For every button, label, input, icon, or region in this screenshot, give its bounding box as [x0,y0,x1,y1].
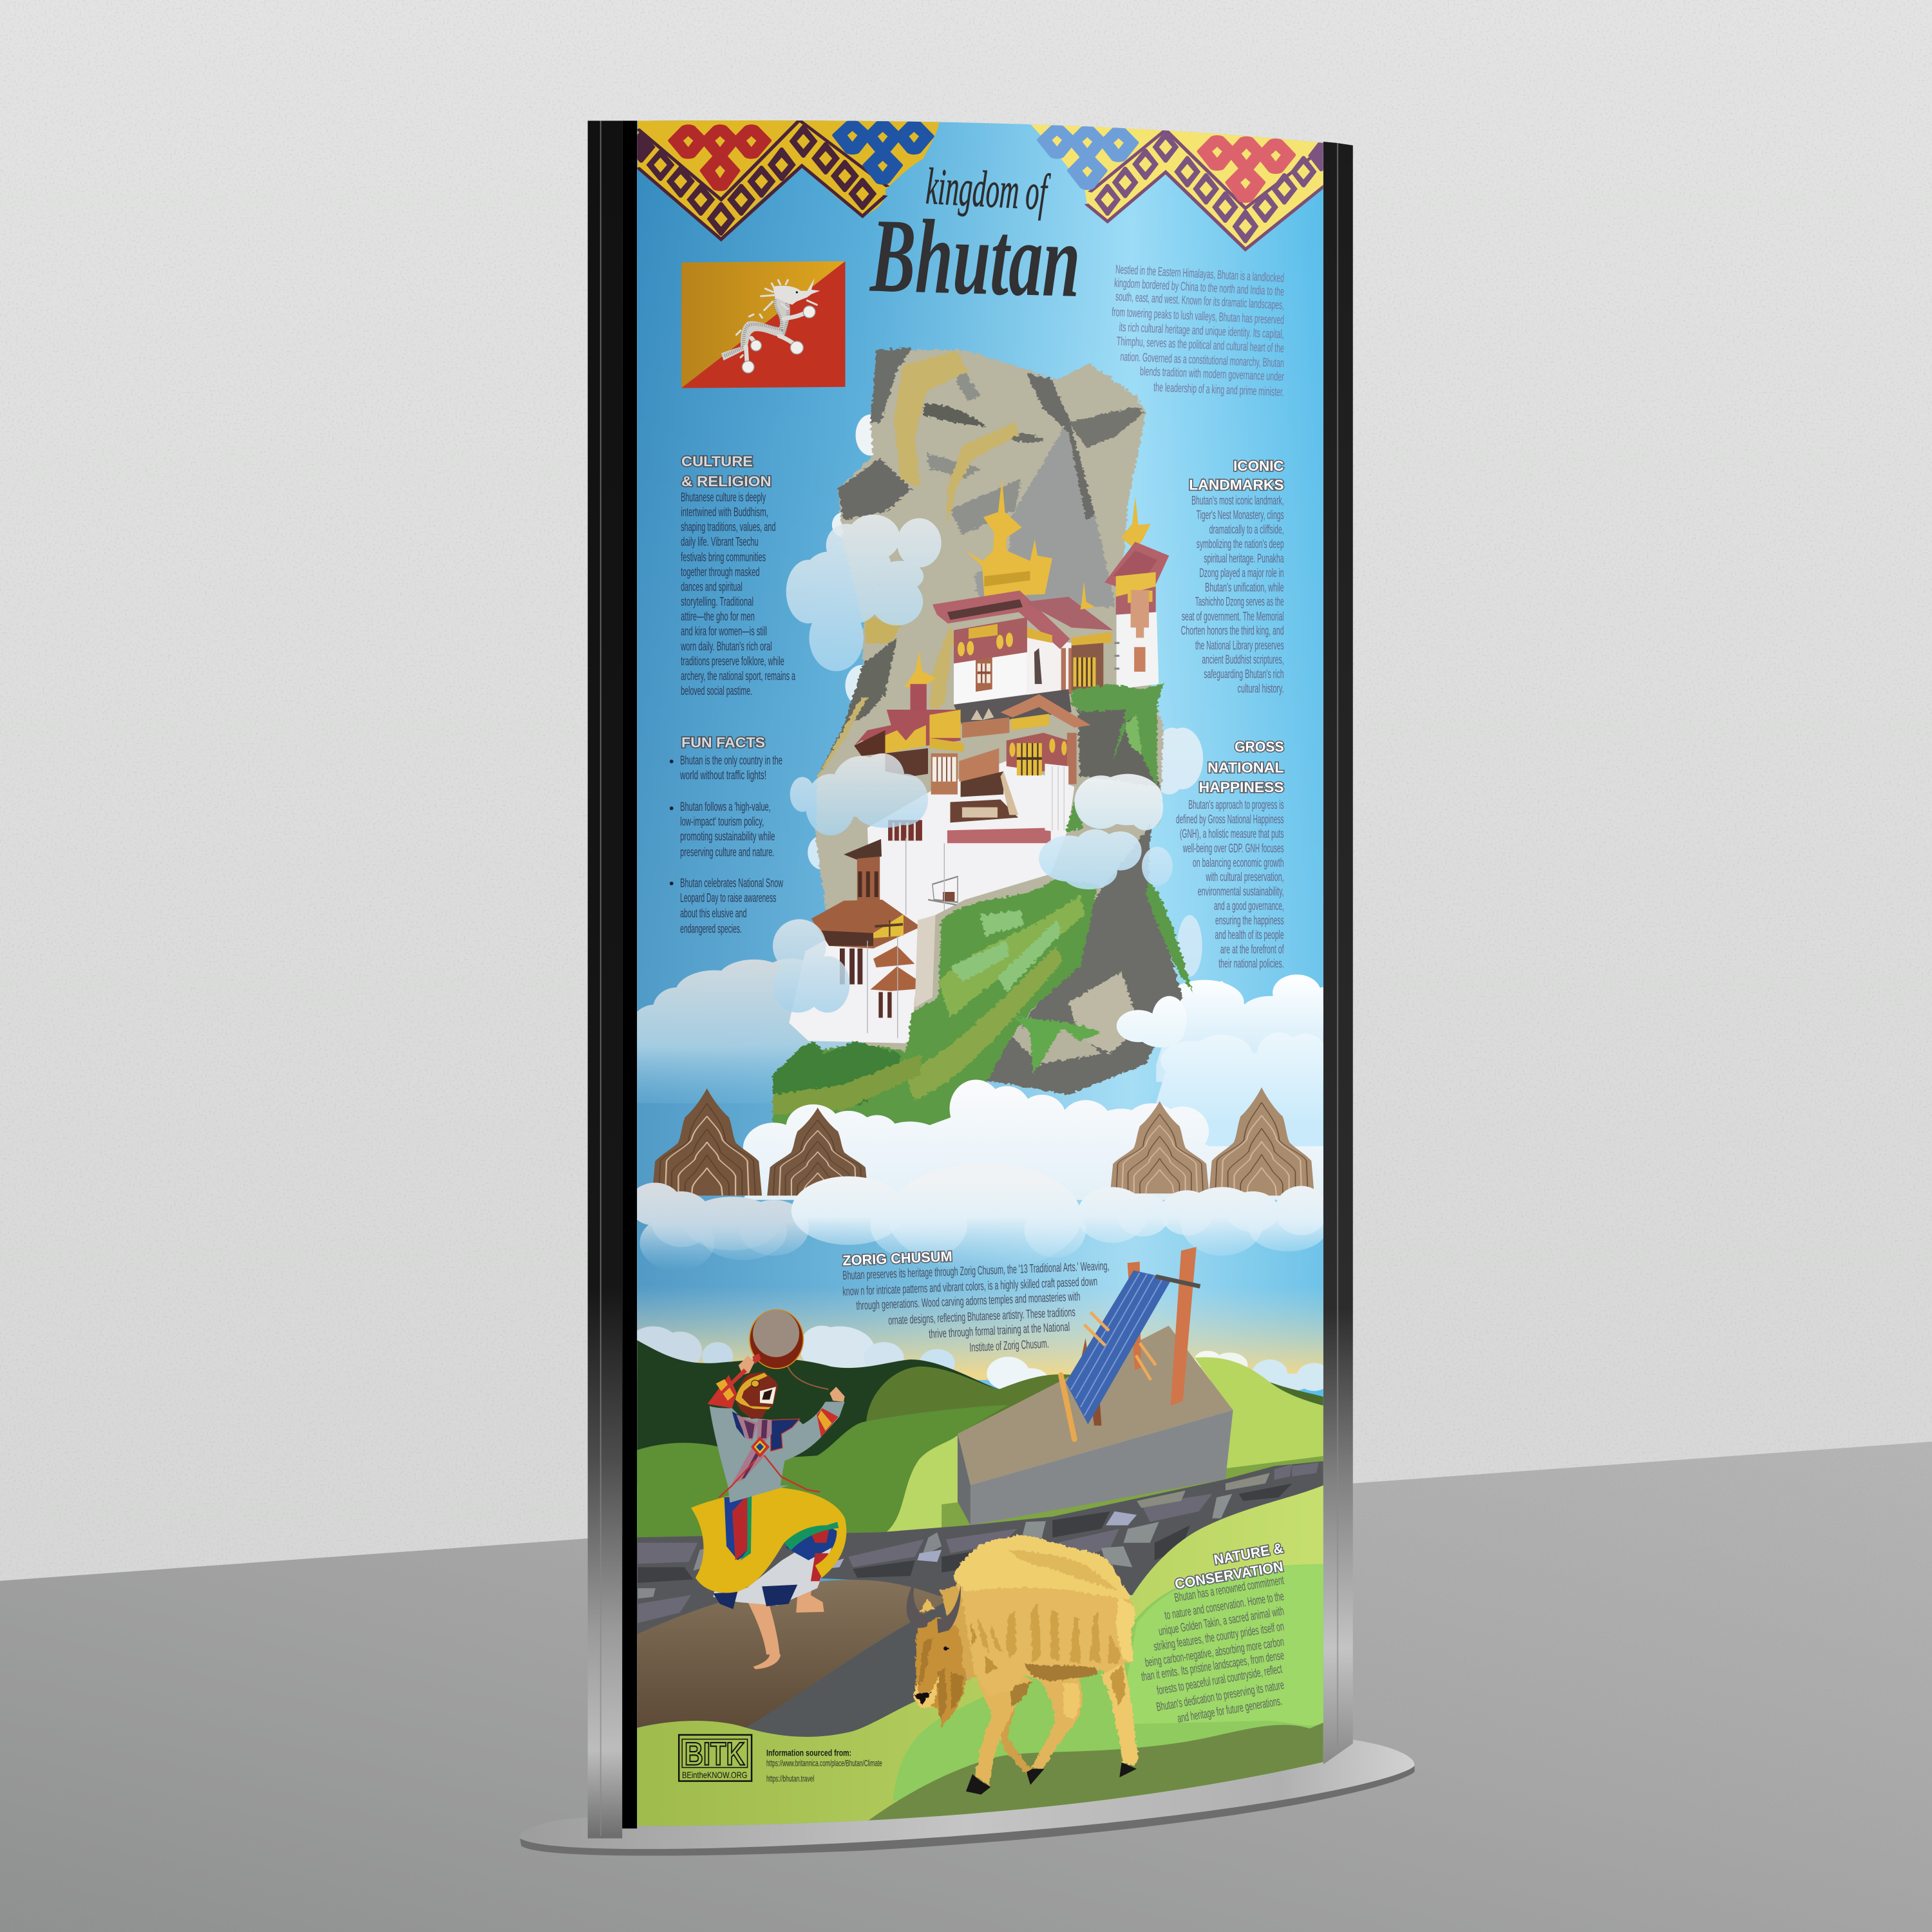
neck [940,1582,979,1681]
title line 1: kingdom of [925,158,1052,222]
illustration: dancer upper body [707,1310,845,1502]
mask [735,1372,778,1419]
cloud bank: front clouds [743,996,1332,1200]
cloud: front centre [743,1080,1332,1200]
green strip behind wall [942,1455,1327,1560]
body text [680,491,795,698]
section: culture and religion [680,453,795,698]
right hill [1195,1357,1327,1480]
stone wall [631,1461,1327,1640]
body text: Chorten honors the third king, and [1181,625,1284,638]
illustration: loom [1061,1247,1200,1439]
bullets: Bhutan celebrates National Snow [680,877,783,891]
nose [914,1692,931,1705]
main window [976,656,992,692]
section: gross national happiness [1176,739,1284,971]
lower dark rock [980,822,1182,1095]
source credits: https://bhutan.travel [766,1774,814,1784]
body text: are at the forefront of [1220,943,1284,956]
heading [1189,458,1284,493]
heading: CONSERVATION [1173,1558,1284,1592]
rear leg right [1101,1660,1139,1766]
body text: safeguarding Bhutan's rich [1204,668,1284,681]
dark band [954,689,1072,725]
bullets: Bhutan is the only country in the [680,754,782,768]
section: fun facts [670,734,783,936]
flag red half [681,261,845,388]
body text: and heritage for future generations. [1177,1694,1283,1726]
chortens [652,1087,1314,1196]
body text: on balancing economic growth [1193,857,1284,870]
cloud bank: back clouds [631,958,1332,1103]
body text [842,1260,1110,1355]
bullets: endangered species. [680,922,742,936]
intro text: south, east, and west. Known for its dramatic landscapes, [1115,290,1284,312]
dark hill [631,1337,999,1483]
sash stripes [724,1494,752,1560]
right small block [1072,632,1112,645]
heading: FUN FACTS [681,734,765,750]
body text: beloved social pastime. [681,685,752,698]
sky [637,111,1327,1836]
ornament: left top border [629,120,940,240]
illustration: cliff rock [816,348,1182,1095]
bullets: preserving culture and nature. [680,846,774,860]
heading: CULTURE [681,453,753,469]
intro text: its rich cultural heritage and unique identity. Its capital, [1119,321,1284,341]
bullets: world without traffic lights! [680,769,766,782]
left sleeve [707,1375,737,1408]
bullets [670,754,783,936]
body text: dances and spiritual [681,580,743,594]
medallion [751,1437,770,1457]
body text: Tashichho Dzong serves as the [1195,596,1284,609]
body text: Bhutan's approach to progress is [1188,799,1284,812]
white monastery walls [789,761,1074,1043]
left post [588,121,622,1839]
body text: ancient Buddhist scriptures, [1202,654,1284,667]
base rim [520,1766,1414,1856]
intro text: from towering peaks to lush valleys, Bhutan has preserved [1112,306,1284,327]
body text: festivals bring communities [681,551,766,564]
inner robe [713,1526,840,1605]
body text [1141,1574,1285,1726]
cloud: lower left [773,919,849,1012]
body text: through generations. Wood carving adorns temples and monasteries with [856,1290,1081,1313]
source credits: Information sourced from: [766,1747,851,1757]
legs [744,1588,780,1654]
body text: Bhutanese culture is deeply [681,491,766,505]
right sleeve stripes [817,1408,838,1437]
body text: daily life. Vibrant Tsechu [681,536,759,549]
heading [1199,739,1284,795]
hands and drumstick [739,1356,755,1375]
horizon clouds [627,1325,1332,1391]
section: zorig chusum [842,1248,1110,1355]
base plate [518,1740,1414,1853]
intro text: Nestled in the Eastern Himalayas, Bhutan is a landlocked [1115,263,1284,285]
section: nature and conservation [1141,1540,1285,1726]
heading [1173,1540,1285,1592]
heading: LANDMARKS [1189,477,1284,493]
ear [919,1598,935,1613]
body text: forests to peaceful rural countryside, reflect [1156,1662,1283,1698]
body text: storytelling. Traditional [681,595,753,609]
right tower [1121,497,1151,549]
heading: HAPPINESS [1199,779,1284,795]
front leg near [972,1666,1032,1786]
body fleece [953,1535,1135,1696]
bullets: promoting sustainability while [680,830,775,844]
body text: symbolizing the nation's deep [1197,538,1284,551]
illustration: monastery [789,478,1169,1043]
pink roof of main temple [933,591,1070,649]
cloud: middle left [790,753,928,835]
section: iconic landmarks [1181,458,1284,696]
illustration: golden takin [913,1535,1139,1786]
olive hill [866,1367,1079,1438]
lower-left house [844,839,882,860]
body text: thrive through formal training at the National [929,1320,1070,1341]
body text: Bhutan has a renowned commitment [1173,1574,1285,1605]
body text: Bhutan's most iconic landmark, [1191,494,1284,507]
body text: Bhutan's dedication to preserving its nature [1155,1678,1285,1714]
body text: well-being over GDP. GNH focuses [1182,842,1284,855]
bullets: about this elusive and [680,907,746,920]
body text: their national policies. [1218,958,1284,971]
dark olive foreground [860,1721,1327,1827]
body text: Institute of Zorig Chusum. [969,1337,1049,1355]
intro text: Thimphu, serves as the political and cultural heart of the [1116,335,1284,355]
flag dragon [721,278,820,373]
right post [1323,142,1353,1765]
intro text: the leadership of a king and prime minister. [1153,381,1284,399]
brown path [631,1580,951,1730]
heading [681,453,772,489]
intro text: nation. Governed as a constitutional monarchy, Bhutan [1120,350,1284,370]
rear leg left [1030,1681,1082,1769]
body text: cultural history. [1238,683,1284,696]
illustration: dancer lower body [691,1487,846,1669]
cloud: right [1039,774,1173,889]
pink band with gold discs [954,618,1027,663]
body text [1176,799,1284,971]
left black edge [622,121,637,1828]
flag of Bhutan [681,261,845,388]
body text: and kira for women—is still [681,625,767,638]
body text: worn daily. Bhutan's rich oral [680,640,772,654]
intro text: blends tradition with modern governance under [1140,365,1285,384]
heading: ICONIC [1233,458,1284,474]
belly band [1024,1663,1099,1682]
heading: GROSS [1235,739,1284,755]
cloud: back right [1156,974,1332,1082]
body text: seat of government. The Memorial [1182,610,1284,623]
body text: being carbon-negative, absorbing more carbon [1144,1635,1285,1670]
red straps [719,1455,820,1497]
floor [0,1442,1932,1932]
middle level with left roof [904,650,936,689]
bullets: low-impact' tourism policy, [680,815,764,829]
panel: poster [627,111,1333,1836]
source credits: https://www.britannica.com/place/Bhutan/Climate [766,1758,882,1768]
body text: dramatically to a cliffside, [1209,523,1284,536]
body text: know n for intricate patterns and vibrant colors, is a highly skilled craft passed down [842,1275,1098,1299]
takin horns and hooves [907,1577,1137,1795]
loom block [958,1325,1233,1485]
body text: shaping traditions, values, and [681,521,775,535]
heading: & RELIGION [681,473,772,489]
light fleece back [953,1535,1132,1599]
cloud: back left [631,958,849,1103]
body text: ensuring the happiness [1215,914,1284,928]
body text: Tiger's Nest Monastery, clings [1197,509,1284,522]
cloud bank: lower band [629,1150,1327,1271]
body text: ornate designs, reflecting Bhutanese artistry. These traditions [888,1306,1075,1328]
logo: BITK: BITK [685,1736,745,1772]
torso [710,1402,845,1502]
front leg far [1000,1707,1032,1773]
yellow skirt [691,1487,846,1593]
drum [750,1310,803,1368]
dark fur streaks [977,1604,1121,1663]
body text: spiritual heritage. Punakha [1204,552,1284,565]
landscape: hills, loom block and stone wall [627,1325,1332,1560]
body text: and health of its people [1215,929,1284,942]
heading: NATIONAL [1208,760,1284,776]
illustration: cliff vegetation [773,684,1193,1136]
flag yellow half [681,261,845,388]
body text [1181,494,1284,696]
body text: intertwined with Buddhism, [681,506,768,520]
bright green lower ground [631,1483,1327,1833]
body text: together through masked [681,565,760,579]
stand [518,121,1414,1856]
cloud: front right [1117,996,1332,1200]
sash [736,1415,758,1441]
logo: BITK: BEintheKNOW.ORG [682,1770,747,1780]
bullets: Leopard Day to raise awareness [680,892,776,905]
body text: archery, the national sport, remains a [681,670,795,683]
logo: BITK [679,1735,752,1781]
body text: Dzong played a major role in [1199,567,1284,580]
mid green hill [631,1405,1008,1539]
body text: striking features, the country prides itself on [1153,1620,1285,1654]
ornament: right top border [1031,124,1333,249]
intro text [1112,263,1285,399]
yellow lichen streaks [894,350,968,489]
grey road [746,1598,968,1737]
body text: to nature and conservation. Home to the [1164,1590,1285,1623]
body text: Bhutan's unification, while [1205,581,1284,594]
body text: Bhutan preserves its heritage through Zorig Chusum, the '13 Traditional Arts.' Weaving, [842,1260,1110,1283]
body text: traditions preserve folklore, while [681,655,784,668]
clouds around monastery [773,515,1173,1012]
body text: environmental sustainability, [1198,886,1284,899]
blue shoulders [771,1419,800,1451]
body text: than it emits. Its pristine landscapes, from dense [1141,1649,1285,1684]
body text: attire—the gho for men [681,610,755,623]
golden roof of main temple [965,478,1052,597]
clouds behind rock [808,415,1203,977]
heading: NATURE & [1213,1540,1285,1568]
title line 2: Bhutan [869,196,1082,319]
intro text: kingdom bordered by China to the north and India to the [1114,276,1284,299]
body text: and a good governance, [1214,900,1284,913]
bullets: Bhutan follows a 'high-value, [680,800,771,814]
eye [943,1647,948,1651]
body text: (GNH), a holistic measure that puts [1180,828,1284,841]
body text: with cultural preservation, [1206,871,1284,884]
heading: ZORIG CHUSUM [842,1248,952,1269]
cloud: upper left [786,515,942,671]
body text: defined by Gross National Happiness [1176,813,1284,826]
head [913,1616,966,1728]
source credits [766,1747,882,1784]
title [869,158,1082,319]
rock shading [974,420,1116,612]
body text: unique Golden Takin, a sacred animal with [1158,1605,1285,1638]
body text: the National Library preserves [1195,639,1284,652]
